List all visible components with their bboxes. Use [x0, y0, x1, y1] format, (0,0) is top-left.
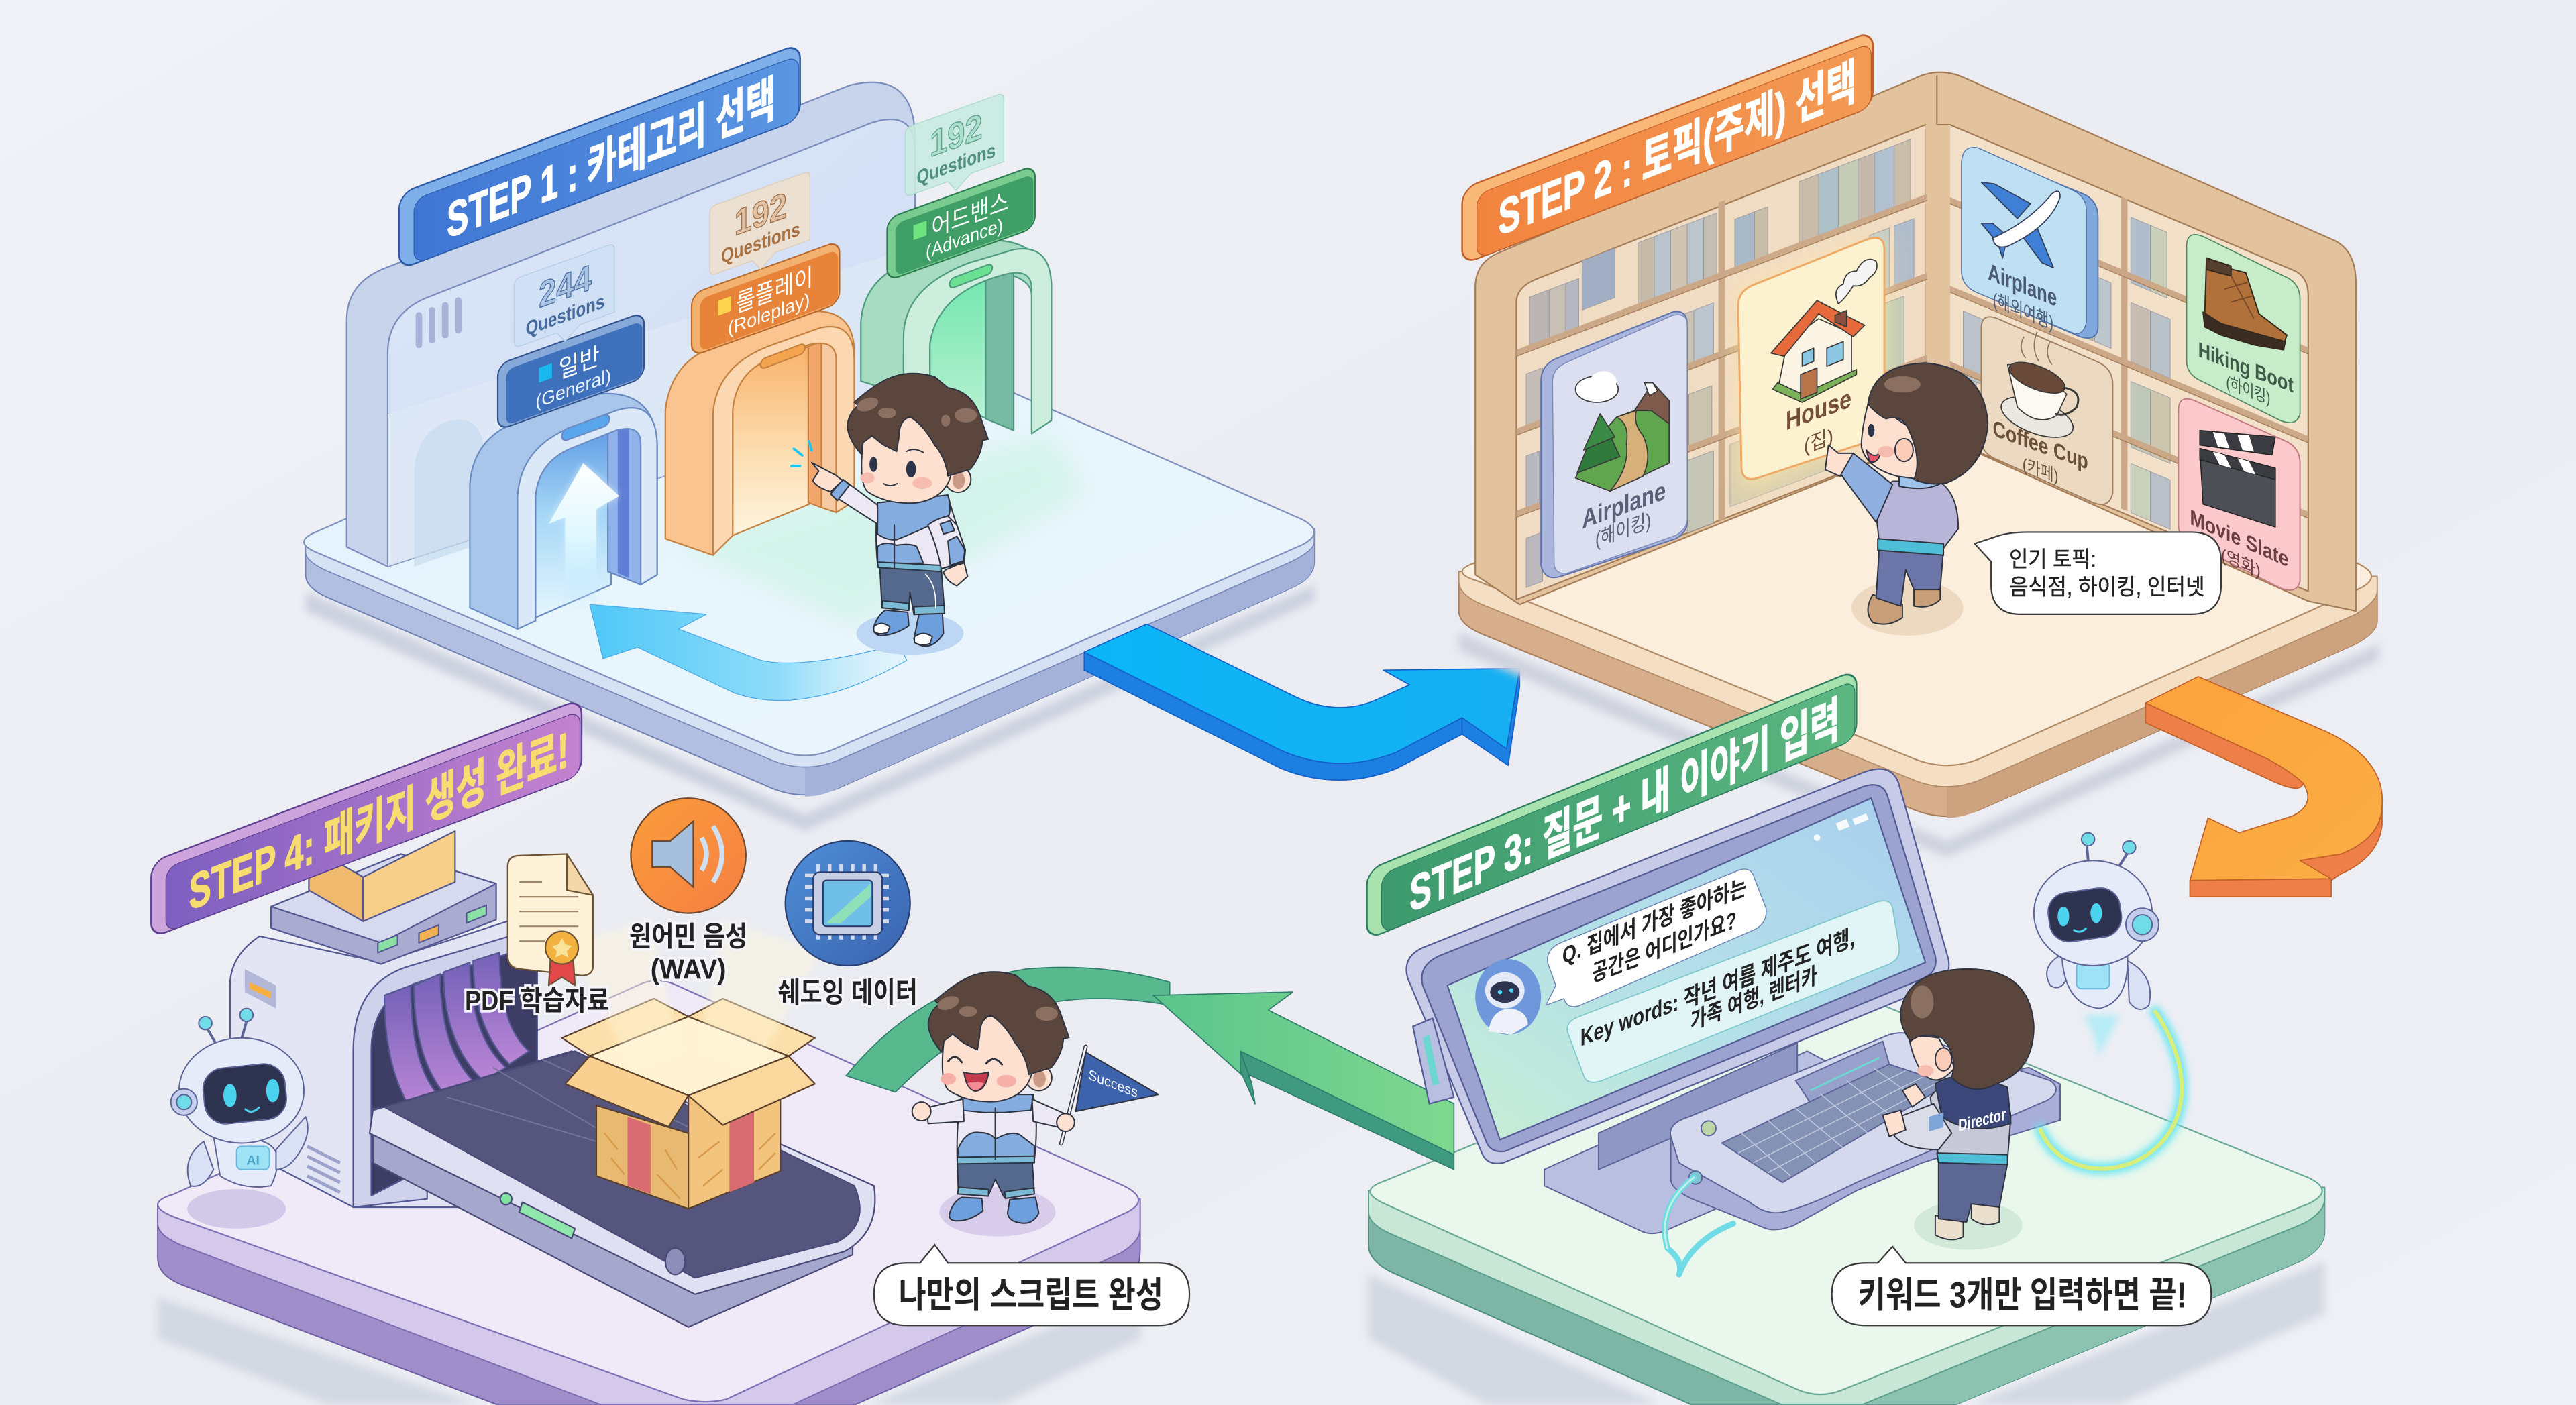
- question bubble: 공간은 어디인가요?: [1592, 907, 1737, 987]
- icon: airplane: [1981, 182, 2060, 268]
- icon: mountain trail: [1576, 371, 1669, 491]
- shelf planks: [1516, 123, 1927, 598]
- robot: waving helper: AI: [246, 1153, 260, 1168]
- card: airplane: [1962, 148, 2098, 338]
- card: coffee cup: (카페): [2023, 454, 2059, 487]
- icon: boot: [2203, 258, 2287, 350]
- label: PDF: PDF 학습자료: [465, 985, 610, 1016]
- right wall books: [1950, 125, 2308, 587]
- wall: [347, 82, 915, 567]
- light beams: [567, 919, 821, 1068]
- card: coffee cup: Coffee Cup: [1993, 416, 2088, 475]
- card: airplane: (해외여행): [1993, 289, 2053, 334]
- heading: step 1 banner: STEP 1 : 카테고리 선택: [447, 71, 775, 249]
- key words bubble: [1567, 901, 1899, 1082]
- machine: package conveyor: [171, 831, 875, 1327]
- label: general: [498, 312, 644, 431]
- label: native voice: [629, 921, 747, 985]
- house card glow: [1738, 237, 1884, 493]
- card: house: (집): [1804, 424, 1833, 458]
- pointing hand: [812, 463, 843, 492]
- label: advance: (Advance): [926, 215, 1003, 264]
- card: hiking boot: [2187, 235, 2300, 423]
- question bubble: Q. 집에서 가장 좋아하는: [1562, 873, 1746, 969]
- free hand: [943, 562, 967, 586]
- icon: clapperboard: [2200, 431, 2275, 527]
- robot: waving helper: [171, 1009, 308, 1229]
- platform shadow: [158, 1289, 1140, 1404]
- tooltip: 192 roleplay: 192: [735, 184, 787, 243]
- label: general: (General): [535, 365, 611, 413]
- arrow: up through gate: [549, 463, 619, 611]
- hair: [847, 374, 988, 476]
- status icons: [1814, 813, 1868, 841]
- label: roleplay: (Roleplay): [728, 289, 810, 340]
- speech bubble: script complete: 나만의 스크립트 완성: [899, 1275, 1163, 1315]
- label: roleplay: [692, 241, 839, 356]
- heading: step 3 banner: [1367, 670, 1856, 940]
- icon: house: [1771, 260, 1877, 402]
- bookshelf frame: [1475, 72, 2356, 611]
- tooltip: 244 questions: Questions: [526, 290, 604, 341]
- shelf planks: [1950, 125, 2308, 587]
- character: boy from behind pointing: [1825, 363, 1988, 636]
- platform shadow: [1368, 1261, 2324, 1404]
- platform: [1459, 371, 2377, 818]
- jacket: [957, 1094, 1036, 1162]
- flag: [1061, 1047, 1159, 1143]
- tooltip: 192 roleplay: [710, 171, 810, 288]
- avatar: [1475, 959, 1541, 1035]
- platform base: [158, 980, 1140, 1404]
- box: [562, 999, 815, 1209]
- question bubble: [1546, 869, 1766, 1007]
- left wall books: [1516, 123, 1927, 598]
- label: general: 일반: [559, 343, 600, 385]
- monitor stand: [1544, 1043, 1931, 1233]
- speech bubble: popular topics: [1975, 532, 2221, 614]
- speech bubble: script complete: [874, 1245, 1189, 1325]
- character: boy pointing at gate: [792, 374, 988, 655]
- card: house: House: [1786, 383, 1851, 436]
- heading: step 3 banner: STEP 3: 질문 + 내 이야기 입력: [1409, 692, 1840, 923]
- outputs: package contents: [465, 798, 918, 1016]
- speech bubble: popular topics: 인기 토픽:: [2009, 547, 2096, 572]
- monitor: [1406, 769, 1949, 1164]
- floor arrow: [590, 604, 907, 701]
- glow arc: [2041, 1012, 2182, 1169]
- key words bubble: Key words: 작년 여름 제주도 여행,: [1580, 923, 1855, 1052]
- panel: step 3 platform and computer: [1368, 995, 2324, 1404]
- tooltip: 192 roleplay: Questions: [721, 218, 800, 268]
- gate: roleplay: [665, 311, 854, 555]
- cyan cables: [1665, 1178, 1733, 1274]
- arrow: orange step 2 to 3: [2145, 677, 2382, 897]
- keyboard: [1670, 1033, 2060, 1229]
- fists: [912, 1102, 931, 1121]
- label: shadowing data: 쉐도잉 데이터: [778, 976, 918, 1008]
- machine body: [230, 911, 537, 1207]
- panel: step 4 platform: [158, 980, 1140, 1404]
- tooltip: 192 advance: 192: [930, 105, 982, 165]
- platform shadow: [1459, 632, 2379, 857]
- jacket: [830, 480, 965, 571]
- icon: coffee cup: [1996, 332, 2078, 445]
- card: hiking boot: Hiking Boot: [2198, 337, 2294, 397]
- arrow: green step 3 to 4: [846, 967, 1454, 1170]
- card: hiking mountain: Airplane: [1582, 475, 1666, 535]
- arrow: blue step 1 to 2: [1084, 624, 1519, 780]
- card: movie slate: (영화): [2221, 545, 2261, 581]
- card: airplane: Airplane: [1988, 258, 2057, 312]
- card: hiking mountain: [1541, 311, 1687, 577]
- character: boy typing: Director: [1958, 1104, 2006, 1135]
- gate: general: [470, 394, 657, 629]
- card: coffee cup: [1981, 317, 2112, 504]
- heading: step 4 banner: STEP 4: 패키지 생성 완료!: [189, 722, 568, 921]
- character: boy typing: [1883, 969, 2034, 1250]
- top unit: [271, 831, 496, 964]
- card: movie slate: Movie Slate: [2190, 506, 2288, 573]
- character: boy with success flag: [912, 972, 1159, 1237]
- shoes: [949, 1197, 983, 1221]
- platform shadow: [306, 585, 1314, 831]
- card: hiking boot: (하이킹): [2226, 372, 2270, 408]
- platform base: [304, 314, 1314, 797]
- speech bubble: keywords: 키워드 3개만 입력하면 끝!: [1858, 1275, 2187, 1315]
- vent slits: [416, 297, 462, 348]
- speech bubble: keywords: [1832, 1247, 2211, 1325]
- card: movie slate: [2178, 399, 2300, 590]
- heading: step 1 banner: [399, 44, 800, 270]
- computer and step 3 scene: [1406, 769, 2211, 1325]
- tap sparks: [792, 441, 812, 466]
- shoes: [873, 610, 943, 646]
- gate: advance: [861, 241, 1051, 434]
- tooltip: 192 advance: Questions: [917, 139, 996, 189]
- card: house: [1738, 238, 1884, 479]
- icon: speaker: [631, 798, 746, 913]
- conveyor: [370, 1051, 875, 1327]
- card: hiking mountain: (해이킹): [1595, 508, 1651, 551]
- robot: flying helper: [2034, 833, 2159, 1058]
- label: advance: 어드밴스: [932, 188, 1009, 243]
- label: roleplay: 롤플레이: [736, 264, 813, 319]
- tooltip: 192 advance: [905, 93, 1004, 209]
- label: advance: [887, 165, 1035, 281]
- speech bubble: popular topics: 음식점, 하이킹, 인터넷: [2009, 575, 2205, 600]
- key words bubble: 가족 여행, 렌터카: [1690, 962, 1817, 1035]
- glow from gates on floor: [674, 435, 1084, 624]
- platform base: [1368, 995, 2324, 1404]
- heading: step 2 banner: [1462, 31, 1873, 264]
- head: [1026, 1065, 1052, 1090]
- panel: step 1 platform: [304, 82, 1314, 831]
- floor shadow: [857, 612, 963, 655]
- tooltip: 244 questions: [515, 243, 614, 359]
- flag: Success: [1087, 1067, 1138, 1101]
- head: [847, 374, 988, 503]
- shorts: [957, 1160, 1034, 1197]
- heading: step 4 banner: [151, 699, 582, 938]
- label: native voice: 원어민 음성: [629, 921, 747, 952]
- tooltip: 244 questions: 244: [539, 257, 592, 316]
- panel: step 2 bookshelf room: [1459, 72, 2379, 857]
- icon: PDF document: [508, 854, 593, 985]
- icon: chip: [786, 841, 910, 966]
- label: native voice: (WAV): [651, 954, 726, 985]
- pants: [879, 567, 945, 614]
